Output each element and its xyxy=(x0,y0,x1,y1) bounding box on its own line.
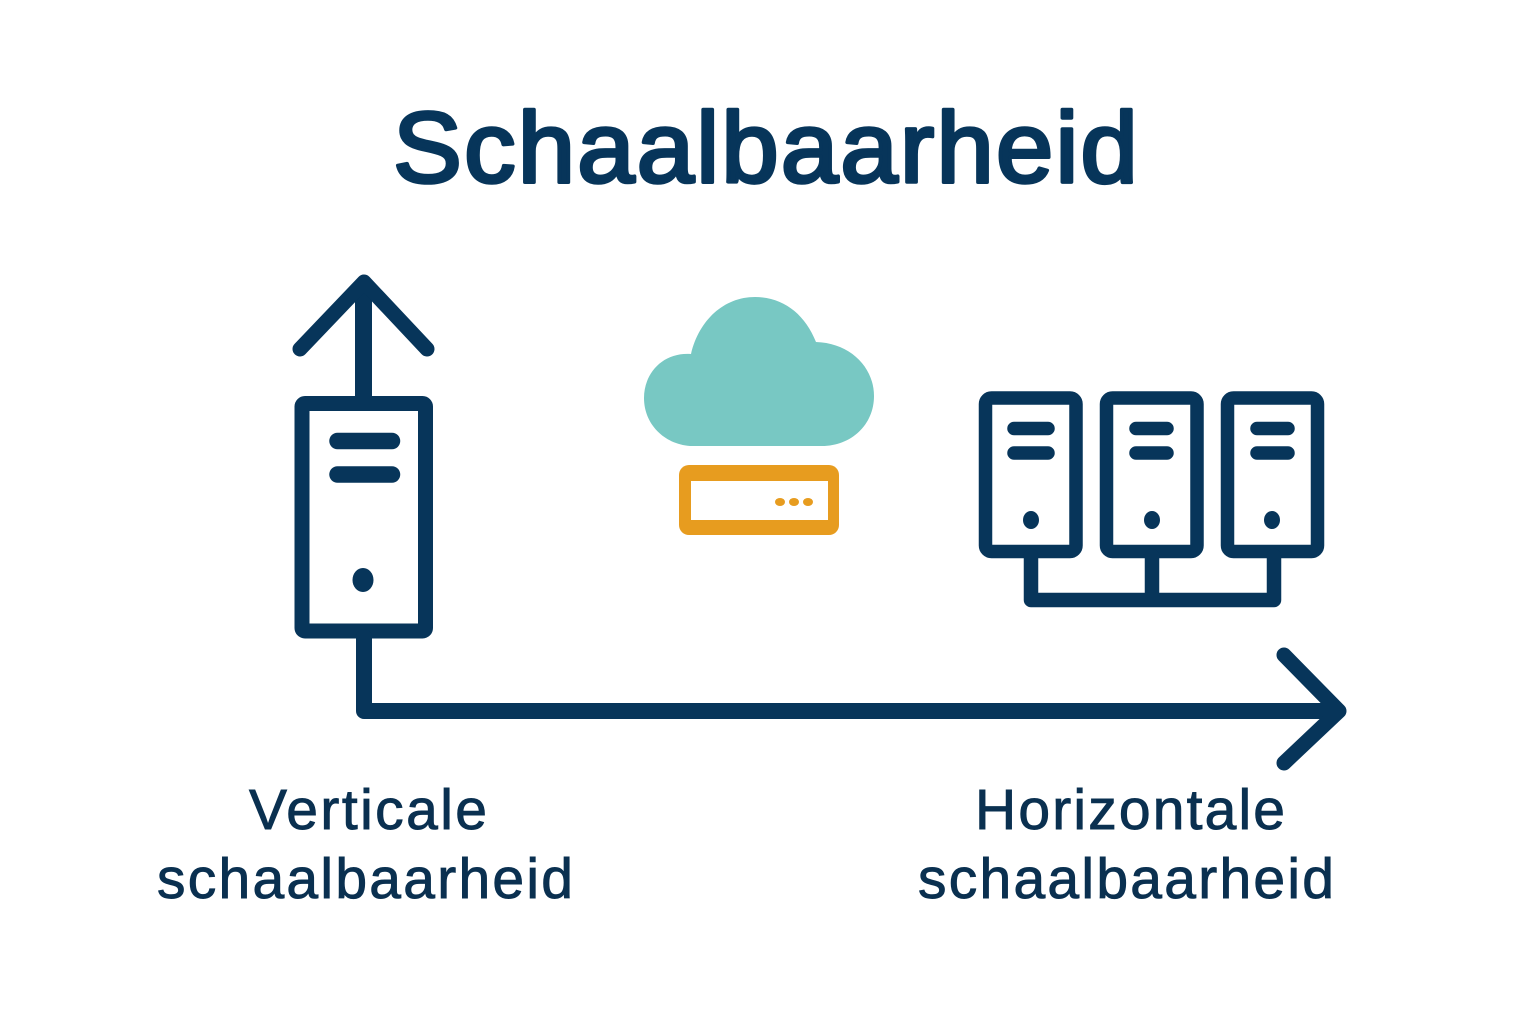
icon: cloud xyxy=(644,297,874,446)
connector lines xyxy=(1031,556,1274,600)
icon: vertical scaling server with up arrow xyxy=(300,282,427,631)
server 3 xyxy=(1228,398,1318,552)
title: Schaalbaarheid xyxy=(393,91,1138,204)
label: vertical scaling: Verticale xyxy=(249,778,487,842)
label: horizontal scaling: Horizontale xyxy=(975,778,1285,842)
arrow: horizontal axis xyxy=(364,637,1339,763)
label: horizontal scaling: schaalbaarheid xyxy=(918,847,1334,911)
label: horizontal scaling xyxy=(918,778,1334,911)
server 2 xyxy=(1106,398,1197,552)
label: vertical scaling: schaalbaarheid xyxy=(157,847,573,911)
server 1 xyxy=(986,398,1076,552)
icon: orange server unit xyxy=(679,465,839,535)
icon: three connected servers xyxy=(986,398,1318,600)
label: vertical scaling xyxy=(157,778,573,911)
